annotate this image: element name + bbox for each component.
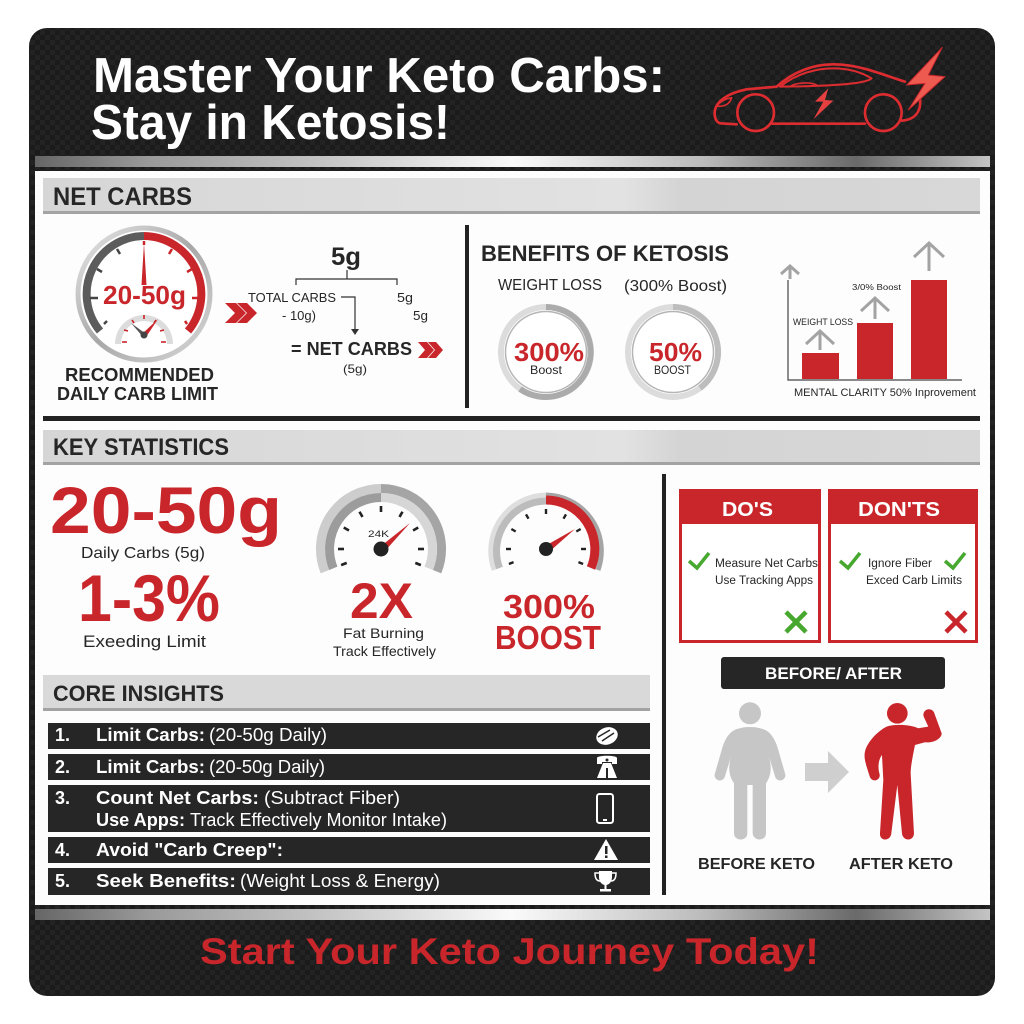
insight row 5: (Weight Loss & Energy) bbox=[240, 871, 440, 891]
gauge: 300% boost bbox=[491, 495, 601, 570]
icon: green check left bbox=[840, 553, 860, 568]
insight row 1 bbox=[48, 723, 650, 749]
icon: green cross bbox=[786, 612, 806, 632]
stat: 1-3%: 1-3% bbox=[78, 561, 220, 635]
before/after banner: BEFORE/ AFTER bbox=[765, 664, 902, 683]
heading: benefits: BENEFITS OF KETOSIS bbox=[481, 241, 729, 266]
icon: red sports car with lightning bolt bbox=[715, 47, 945, 131]
insight row 3: Count Net Carbs: bbox=[96, 788, 259, 808]
insight row 3: (Subtract Fiber) bbox=[264, 788, 400, 808]
insight row 1: 1. bbox=[55, 725, 70, 745]
title: Master Your Keto Carbs: bbox=[93, 49, 665, 103]
panel: do's: Use Tracking Apps bbox=[715, 575, 813, 587]
panel: do's bbox=[679, 489, 821, 642]
stat: 1-3%: Exeeding Limit bbox=[83, 632, 206, 651]
panel: do's: DO'S bbox=[722, 498, 773, 521]
insight row 4: 4. bbox=[55, 840, 70, 860]
stat: 20-50g: Daily Carbs (5g) bbox=[81, 545, 205, 562]
ring: 50% boost: 50% bbox=[649, 337, 702, 367]
stat: 300% boost: BOOST bbox=[495, 619, 601, 656]
icon: red cross bbox=[946, 612, 966, 632]
insight row 4 bbox=[48, 837, 650, 863]
panel: don'ts: DON'TS bbox=[858, 498, 940, 521]
net carbs formula: 5g bbox=[331, 243, 361, 271]
heading: net carbs bbox=[43, 178, 980, 214]
net carbs formula: TOTAL CARBS bbox=[248, 290, 336, 305]
insight row 5 bbox=[48, 868, 650, 895]
heading: net carbs: NET CARBS bbox=[53, 183, 192, 211]
heading: key statistics: KEY STATISTICS bbox=[53, 434, 229, 461]
insight row 2: (20-50g Daily) bbox=[209, 757, 325, 777]
icon: food bbox=[594, 724, 620, 748]
bar chart: WEIGHT LOSS bbox=[793, 317, 853, 327]
icon: chevrons left bbox=[225, 303, 257, 323]
stat: 20-50g: 20-50g bbox=[50, 473, 282, 547]
gauge: 2X fat burning bbox=[320, 488, 442, 572]
insight row 3: Track Effectively Monitor Intake) bbox=[190, 810, 447, 830]
header bbox=[91, 47, 945, 150]
gauge caption bbox=[57, 364, 219, 404]
net carbs formula: (5g) bbox=[343, 362, 367, 376]
insight row 5: 5. bbox=[55, 871, 70, 891]
icon: trophy bbox=[595, 871, 616, 892]
icon: telephone bbox=[597, 756, 617, 778]
heading: core insights bbox=[43, 675, 650, 711]
panel: net carbs bbox=[43, 178, 980, 404]
icon: warning bbox=[594, 839, 618, 860]
panel: do's: Measure Net Carbs bbox=[715, 558, 818, 570]
chrome bar bottom bbox=[35, 909, 990, 920]
insight row 2 bbox=[48, 754, 650, 780]
net carbs formula: = NET CARBS bbox=[291, 339, 412, 359]
gauge caption: DAILY CARB LIMIT bbox=[57, 383, 219, 404]
arrow bbox=[805, 751, 849, 793]
figure: after keto bbox=[865, 703, 942, 840]
net carbs formula: 5g bbox=[397, 290, 413, 305]
labels: AFTER KETO bbox=[849, 856, 953, 873]
heading: core insights: CORE INSIGHTS bbox=[53, 681, 224, 706]
panel: don'ts bbox=[828, 489, 978, 642]
gauge caption: RECOMMENDED bbox=[65, 364, 214, 385]
bar chart bbox=[781, 243, 976, 399]
insight row 2: 2. bbox=[55, 757, 70, 777]
stat: 2X: 2X bbox=[350, 573, 413, 629]
stat: 2X bbox=[333, 573, 436, 659]
bar chart: 3/0% Boost bbox=[852, 283, 902, 292]
gauge: 2X fat burning: 24K bbox=[368, 529, 390, 540]
labels: BEFORE KETO bbox=[698, 856, 815, 873]
net carbs formula: 5g bbox=[413, 308, 428, 323]
insight row 3: Use Apps: bbox=[96, 810, 185, 830]
panel: before and after bbox=[698, 657, 953, 873]
ring: 300% boost: 300% bbox=[514, 337, 584, 367]
gauge: daily carb limit bbox=[78, 228, 210, 360]
ring labels bbox=[498, 277, 727, 295]
footer call to action: Start Your Keto Journey Today! bbox=[200, 931, 819, 972]
insight row 3 bbox=[48, 785, 650, 832]
stat: 300% boost: 300% bbox=[503, 588, 595, 625]
labels bbox=[698, 856, 953, 873]
figure: before keto bbox=[715, 702, 785, 840]
ring: 300% boost: Boost bbox=[530, 365, 563, 377]
icon: smartphone bbox=[597, 794, 613, 823]
insight row 4: Avoid "Carb Creep": bbox=[96, 840, 283, 860]
gauge: daily carb limit: 20-50g bbox=[103, 280, 186, 310]
title: Stay in Ketosis! bbox=[91, 96, 450, 150]
ring: 300% boost bbox=[501, 307, 591, 397]
bar chart: MENTAL CLARITY 50% Inprovement bbox=[794, 387, 976, 399]
before/after banner bbox=[721, 657, 945, 689]
insight row 1: (20-50g Daily) bbox=[209, 725, 327, 745]
ring labels: WEIGHT LOSS bbox=[498, 277, 602, 294]
panel: don'ts: Exced Carb Limits bbox=[866, 575, 962, 587]
panel: key statistics bbox=[43, 430, 980, 659]
heading: key statistics bbox=[43, 430, 980, 465]
icon: green check bbox=[689, 553, 709, 568]
stat: 300% boost bbox=[495, 588, 601, 656]
panel: don'ts: Ignore Fiber bbox=[868, 558, 932, 570]
insight row 5: Seek Benefits: bbox=[96, 871, 236, 891]
icon: chevrons right bbox=[418, 342, 443, 358]
stat: 2X: Track Effectively bbox=[333, 643, 436, 659]
net carbs formula: - 10g) bbox=[282, 308, 316, 323]
ring: 50% boost: BOOST bbox=[654, 365, 691, 377]
chrome bar top bbox=[35, 156, 990, 167]
title bbox=[91, 49, 665, 150]
main white panel bbox=[35, 171, 990, 905]
insight row 1: Limit Carbs: bbox=[96, 725, 205, 745]
insight row 3: 3. bbox=[55, 788, 70, 808]
insight row 2: Limit Carbs: bbox=[96, 757, 205, 777]
panel: core insights bbox=[43, 675, 650, 895]
stat: 2X: Fat Burning bbox=[343, 625, 424, 641]
ring labels: (300% Boost) bbox=[624, 278, 727, 295]
net carbs formula bbox=[248, 243, 428, 376]
panel: benefits of ketosis bbox=[481, 241, 976, 399]
icon: green check right bbox=[945, 553, 965, 568]
ring: 50% boost bbox=[628, 307, 718, 397]
